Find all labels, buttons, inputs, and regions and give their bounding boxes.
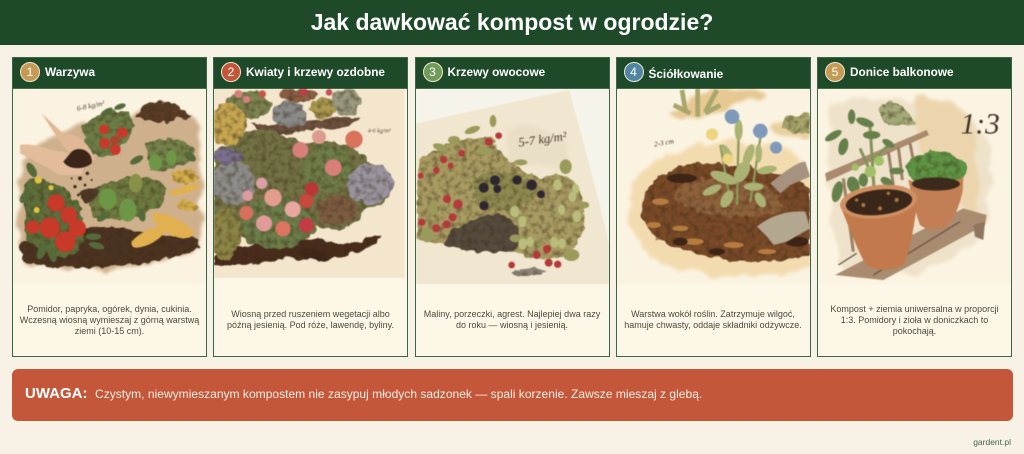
panel heading: Warzywa [45,65,95,79]
illustration: mulch ring around plant: 2-3 cm [653,136,674,149]
panel description: do roku — wiosną i jesienią. [456,320,568,330]
panel description: późną jesienią. Pod róże, lawendę, byliny. [227,320,394,330]
illustration: vegetable bed with hands: 6-8 kg/m² [76,98,106,113]
panel: warzywa [12,57,207,357]
panel: kwiaty i krzewy [213,57,408,357]
number badge 3: 3 [429,65,436,79]
panel header [616,57,810,89]
warning label: UWAGA: [25,385,88,402]
number badge 5 [825,62,845,82]
number badge 1 [20,62,40,82]
title banner [0,0,1024,45]
number badge 1: 1 [27,65,33,79]
panel header [213,57,408,89]
panel description: hamuje chwasty, oddaje składniki odżywcze. [624,320,802,330]
panel description: pokochają. [893,326,936,336]
title banner: Jak dawkować kompost w ogrodzie? [311,9,713,35]
panel: krzewy owocowe [414,57,610,357]
illustration: mulch ring around plant [617,88,810,282]
panel description: Warstwa wokół roślin. Zatrzymuje wilgoć, [631,309,795,319]
panel header [817,57,1012,89]
panel description: Maliny, porzeczki, agrest. Najlepiej dwa razy [424,309,600,319]
number badge 3 [422,62,442,82]
illustration: vegetable bed with hands [13,88,206,277]
panel description: Pomidor, papryka, ogórek, dynia, cukinia. [27,304,192,314]
panel: ściółkowanie [616,57,810,357]
panel description: Wiosną przed ruszeniem wegetacji albo [231,309,390,319]
illustration: fruit bushes [416,88,609,284]
number badge 4 [624,62,644,82]
illustration: fruit bushes: 5-7 kg/m² [517,129,567,150]
panel description [830,304,999,336]
panel heading: Ściółkowanie [648,67,723,81]
number badge 2 [221,62,241,82]
panel header [12,57,207,89]
panel header [414,57,610,89]
illustration: balcony pots: 1:3 [961,108,1000,140]
panel description [624,309,802,330]
panel description [227,309,394,330]
panel description: Kompost + ziemia uniwersalna w proporcji [830,304,999,314]
panel description [20,304,200,336]
warning text: Czystym, niewymieszanym kompostem nie zasypuj młodych sadzonek — spali korzenie. Zawsze mieszaj z glebą. [95,387,702,401]
number badge 5: 5 [832,65,838,79]
illustration: flower bed [214,88,407,278]
panel heading: Donice balkonowe [850,65,954,79]
number badge 2: 2 [228,65,234,79]
panel heading: Kwiaty i krzewy ozdobne [246,65,385,79]
panel description: 1:3. Pomidory i zioła w doniczkach to [841,314,988,324]
number badge 4: 4 [630,65,637,79]
panel description [424,309,600,330]
panel: donice balkonowe [817,57,1012,357]
illustration: balcony pots [818,88,1011,282]
footer credit: gardent.pl [973,437,1011,447]
panel heading: Krzewy owocowe [448,65,545,79]
warning callout [12,369,1013,421]
panel description: ziemi (10-15 cm). [75,326,144,336]
panel description: Wczesną wiosną wymieszaj z górną warstwą [20,314,199,324]
illustration: flower bed: 4-6 kg/m² [368,127,391,134]
